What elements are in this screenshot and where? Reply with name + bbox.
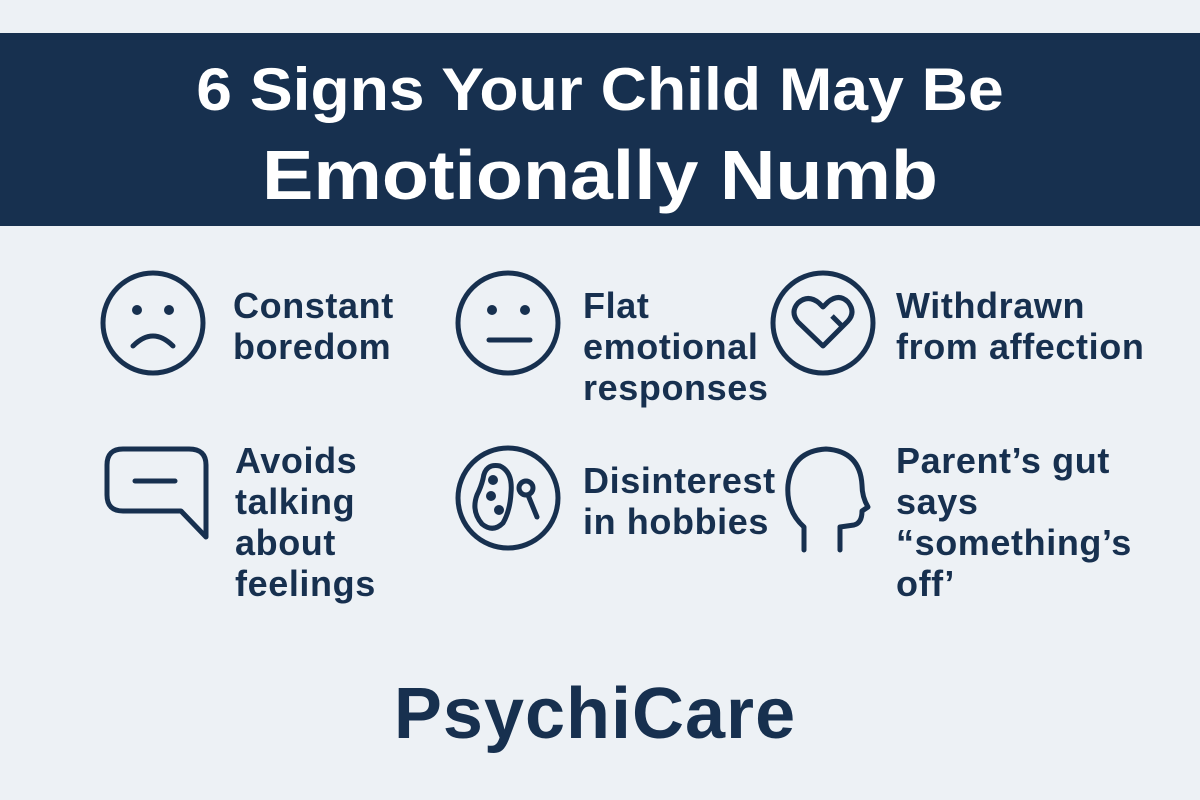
- text: flat emotional responses: Flat: [583, 285, 649, 326]
- text: flat emotional responses: responses: [583, 367, 768, 408]
- text: avoids talking about feelings: feelings: [235, 563, 376, 604]
- text: flat emotional responses: [583, 285, 768, 408]
- icon: neutral face: [456, 270, 560, 376]
- text: flat emotional responses: emotional: [583, 326, 758, 367]
- text: parent's gut: Parent’s gut: [896, 440, 1110, 481]
- icon: head profile: [785, 446, 870, 552]
- text: avoids talking about feelings: about: [235, 522, 336, 563]
- icon: sad face: [100, 270, 206, 376]
- title banner: Emotionally Numb: [262, 136, 938, 214]
- text: parent's gut: “something’s: [896, 522, 1132, 563]
- text: avoids talking about feelings: [235, 440, 376, 604]
- title banner: [0, 33, 1200, 226]
- text: parent's gut: [896, 440, 1132, 604]
- text: avoids talking about feelings: talking: [235, 481, 355, 522]
- text: parent's gut: off’: [896, 563, 955, 604]
- text: constant boredom: boredom: [233, 326, 391, 367]
- text: constant boredom: Constant: [233, 285, 394, 326]
- text: withdrawn from affection: Withdrawn: [896, 285, 1085, 326]
- text: disinterest in hobbies: in hobbies: [583, 501, 769, 542]
- text: withdrawn from affection: [896, 285, 1144, 367]
- icon: palette: [456, 446, 560, 550]
- text: avoids talking about feelings: Avoids: [235, 440, 357, 481]
- text: withdrawn from affection: from affection: [896, 326, 1144, 367]
- icon: speech bubble: [104, 446, 208, 540]
- icon: broken heart: [770, 270, 876, 376]
- text: disinterest in hobbies: Disinterest: [583, 460, 776, 501]
- text: constant boredom: [233, 285, 394, 367]
- text: disinterest in hobbies: [583, 460, 776, 542]
- title banner: 6 Signs Your Child May Be: [196, 56, 1004, 123]
- text: parent's gut: says: [896, 481, 978, 522]
- brand: PsychiCare: PsychiCare: [394, 674, 796, 754]
